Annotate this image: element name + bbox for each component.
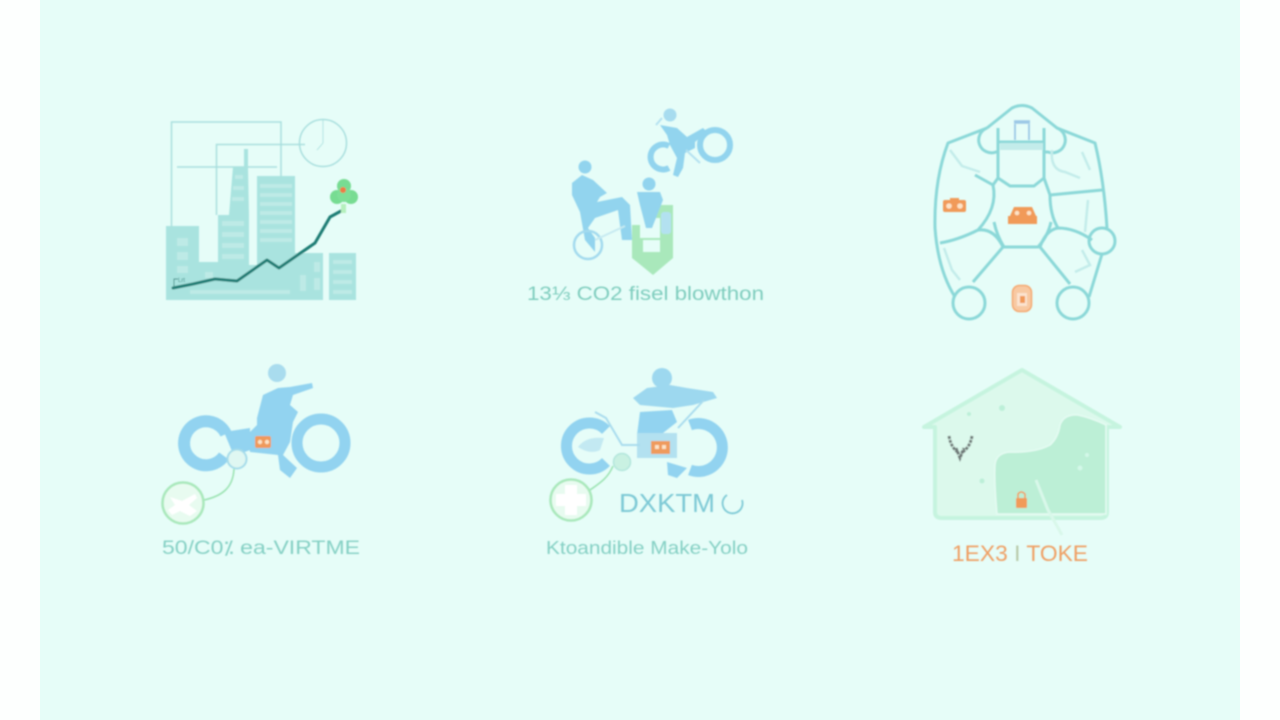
brand text: DXKTM [619,488,715,518]
small start label: Lrt [178,278,185,284]
water blob [995,415,1106,514]
river [1036,480,1062,535]
connector line [204,469,234,500]
connector hub [228,450,246,468]
city skyline [166,149,356,300]
faint central bowl fill [1000,143,1043,150]
panel: cyclists [527,108,764,305]
small start label [174,278,185,288]
icon: green badge [162,482,204,524]
icon: centre orange car [1008,207,1037,224]
icon: bottom orange bag [1012,285,1032,312]
icon: top gate [1014,122,1030,140]
bike wheels [184,419,345,467]
caption: Ktoandible Make-Yolo [546,538,748,558]
faint map texture [944,150,1090,280]
icon: orange engine [255,436,271,448]
panel: motorbike rider two [546,368,748,558]
caption: 50/C0⁒ ea-VIRTME [162,538,360,559]
upper rider [651,108,730,177]
icon: green shield [632,205,673,275]
icon: tree marker [330,179,358,213]
wiring lines and clock [172,120,346,226]
connector hub [614,454,630,470]
icon: left orange device [943,198,966,212]
rider [224,364,313,478]
rider [578,368,717,478]
panel: motorbike rider one [162,364,360,559]
middle figure [637,178,671,234]
connector line [590,466,613,490]
bike wheels [566,423,722,472]
trend line [173,211,341,288]
caption: 1EX3 I TOKE [952,541,1088,566]
lower rider [572,160,632,259]
speckles [967,405,1089,484]
panel: network map [935,106,1115,319]
map outline [935,106,1115,319]
panel: city growth chart [166,120,358,300]
house shape [924,370,1120,518]
caption: 13⅓ CO2 fisel blowthon [527,284,764,305]
icon: orange lock [1016,492,1027,508]
icon: orange engine [651,441,670,454]
icon: green cross badge [550,480,592,520]
icon: refresh ring [723,495,743,513]
icon: winged emblem [949,436,972,458]
panel: green house [924,370,1120,566]
